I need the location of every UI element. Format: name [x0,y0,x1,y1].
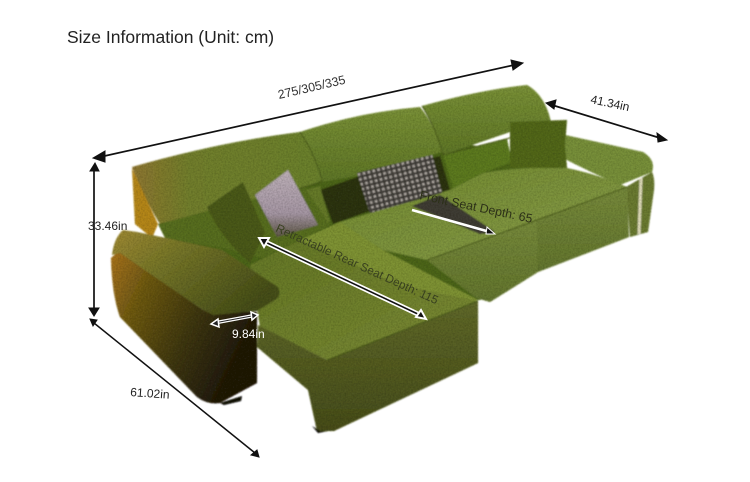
label: height: 33.46in [88,219,127,233]
lower left back [158,188,330,258]
left arm front [111,250,257,403]
sofa illustration [111,85,654,433]
label: front seat depth: Front Seat Depth: 65 [418,188,534,226]
right seat top [450,168,627,220]
right seat front [537,187,629,272]
pillow: right green [510,120,567,168]
right arm top [563,135,653,185]
label: chaise length: 61.02in [130,385,170,402]
pillow: dark green left [207,182,265,263]
right back cushion [422,85,551,155]
left arm top [112,230,279,315]
label: depth: 41.34in [589,92,631,114]
feet [220,396,328,433]
chaise seat side [300,222,478,330]
arrow: chaise length 61.02in [90,319,259,457]
middle back cushion [300,107,442,182]
middle seat top [340,190,537,260]
title: Size Information (Unit: cm) [67,27,274,47]
back frame edge [132,168,158,238]
chaise top [250,240,478,360]
pillow: houndstooth [357,155,442,213]
green strip by mauve pillow [305,186,330,226]
dark wedge under houndstooth [412,195,495,234]
inner base fill [160,140,560,300]
arrow: depth 41.34in [546,100,667,142]
arrow: retractable rear seat depth [259,238,426,319]
middle lower back [320,156,450,224]
arrow: front seat depth [412,210,495,234]
pillow: mauve [255,170,318,237]
arrow: overall length [93,60,523,162]
label: retractable rear seat depth: Retractable Rear Seat Depth: 115 [274,221,441,307]
arrow: height 33.46in [89,163,99,316]
middle seat front [427,220,538,302]
left back cushion [132,132,322,224]
right lower back roll [443,139,512,188]
right arm side panel [626,172,654,237]
seat piping [300,106,627,360]
label: arm width: 9.84in [232,327,265,341]
label: overall length: 275/305/335 [277,73,347,102]
chaise front [257,301,478,431]
arrow: arm width 9.84in [211,312,258,327]
